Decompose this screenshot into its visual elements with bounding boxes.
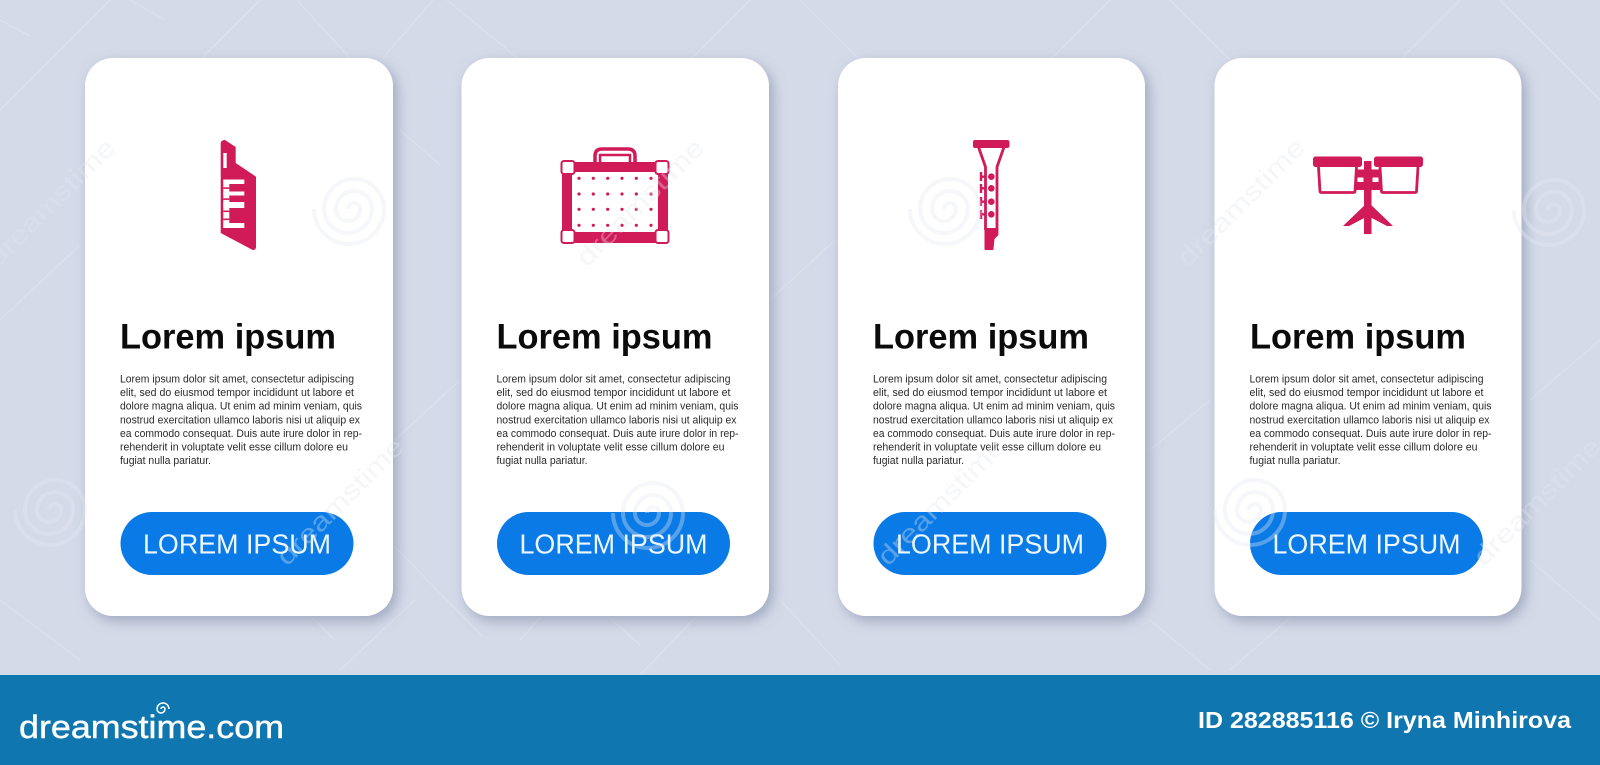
body text: rehenderit in voluptate velit esse cillum dolore eu <box>873 442 1101 454</box>
body text: rehenderit in voluptate velit esse cillum dolore eu <box>120 442 348 454</box>
card 2 <box>462 58 769 616</box>
icon: keytar <box>221 140 256 250</box>
body text: rehenderit in voluptate velit esse cillum dolore eu <box>1250 442 1478 454</box>
body text: dolore magna aliqua. Ut enim ad minim veniam, quis <box>873 401 1116 413</box>
watermark overlay: dreamstime <box>1171 132 1311 272</box>
heading: Lorem ipsum <box>120 318 336 356</box>
icon: bongo drums <box>1313 156 1423 234</box>
button <box>497 512 730 575</box>
body text <box>1250 373 1492 467</box>
body text: Lorem ipsum dolor sit amet, consectetur adipiscing <box>496 373 730 385</box>
body text: fugiat nulla pariatur. <box>873 455 964 467</box>
body text: elit, sed do eiusmod tempor incididunt ut labore et <box>120 387 354 399</box>
footer band <box>0 675 1600 765</box>
body text: elit, sed do eiusmod tempor incididunt ut labore et <box>496 387 730 399</box>
button <box>874 512 1106 575</box>
body text: elit, sed do eiusmod tempor incididunt ut labore et <box>1250 387 1484 399</box>
icon: clarinet <box>973 140 1010 250</box>
heading: Lorem ipsum <box>873 318 1089 356</box>
body text: ea commodo consequat. Duis aute irure dolor in rep- <box>120 428 362 440</box>
watermark overlay: dreamstime <box>270 431 410 571</box>
body text: dolore magna aliqua. Ut enim ad minim veniam, quis <box>120 401 363 413</box>
body text: nostrud exercitation ullamco laboris nisi ut aliquip ex <box>1250 414 1490 426</box>
body text: fugiat nulla pariatur. <box>496 455 588 467</box>
body text: nostrud exercitation ullamco laboris nisi ut aliquip ex <box>873 414 1114 426</box>
footer credit: ID 282885116 © Iryna Minhirova <box>1198 707 1572 733</box>
body text: fugiat nulla pariatur. <box>1250 455 1340 467</box>
body text: Lorem ipsum dolor sit amet, consectetur adipiscing <box>1250 373 1484 385</box>
body text: fugiat nulla pariatur. <box>120 455 211 467</box>
button: LOREM IPSUM <box>143 528 331 560</box>
heading: Lorem ipsum <box>1250 318 1466 356</box>
body text: nostrud exercitation ullamco laboris nisi ut aliquip ex <box>496 414 737 426</box>
body text <box>873 373 1116 467</box>
button <box>1250 512 1483 575</box>
body text: nostrud exercitation ullamco laboris nisi ut aliquip ex <box>120 414 361 426</box>
icon: amplifier case <box>562 149 668 243</box>
body text: dolore magna aliqua. Ut enim ad minim veniam, quis <box>1250 401 1492 413</box>
body text: Lorem ipsum dolor sit amet, consectetur adipiscing <box>873 373 1107 385</box>
body text <box>120 373 363 467</box>
watermark overlay: dreamstime <box>1467 431 1600 571</box>
footer logo: dreamstime.com <box>19 709 284 745</box>
button: LOREM IPSUM <box>1272 528 1460 560</box>
watermark overlay <box>0 132 1600 571</box>
body text: ea commodo consequat. Duis aute irure dolor in rep- <box>1250 428 1492 440</box>
button: LOREM IPSUM <box>896 528 1084 560</box>
body text: elit, sed do eiusmod tempor incididunt ut labore et <box>873 387 1107 399</box>
body text: ea commodo consequat. Duis aute irure dolor in rep- <box>496 428 739 440</box>
card 4 <box>1214 58 1522 616</box>
card 3 <box>838 58 1145 616</box>
body text: Lorem ipsum dolor sit amet, consectetur adipiscing <box>120 373 354 385</box>
body text: rehenderit in voluptate velit esse cillum dolore eu <box>496 442 724 454</box>
button <box>120 512 354 575</box>
watermark overlay: dreamstime <box>871 431 1011 571</box>
body text: ea commodo consequat. Duis aute irure dolor in rep- <box>873 428 1115 440</box>
heading: Lorem ipsum <box>496 318 712 356</box>
body text: dolore magna aliqua. Ut enim ad minim veniam, quis <box>496 401 739 413</box>
body text <box>496 373 739 467</box>
button: LOREM IPSUM <box>520 528 708 560</box>
card 1 <box>85 58 393 616</box>
watermark overlay: dreamstime <box>570 132 710 272</box>
